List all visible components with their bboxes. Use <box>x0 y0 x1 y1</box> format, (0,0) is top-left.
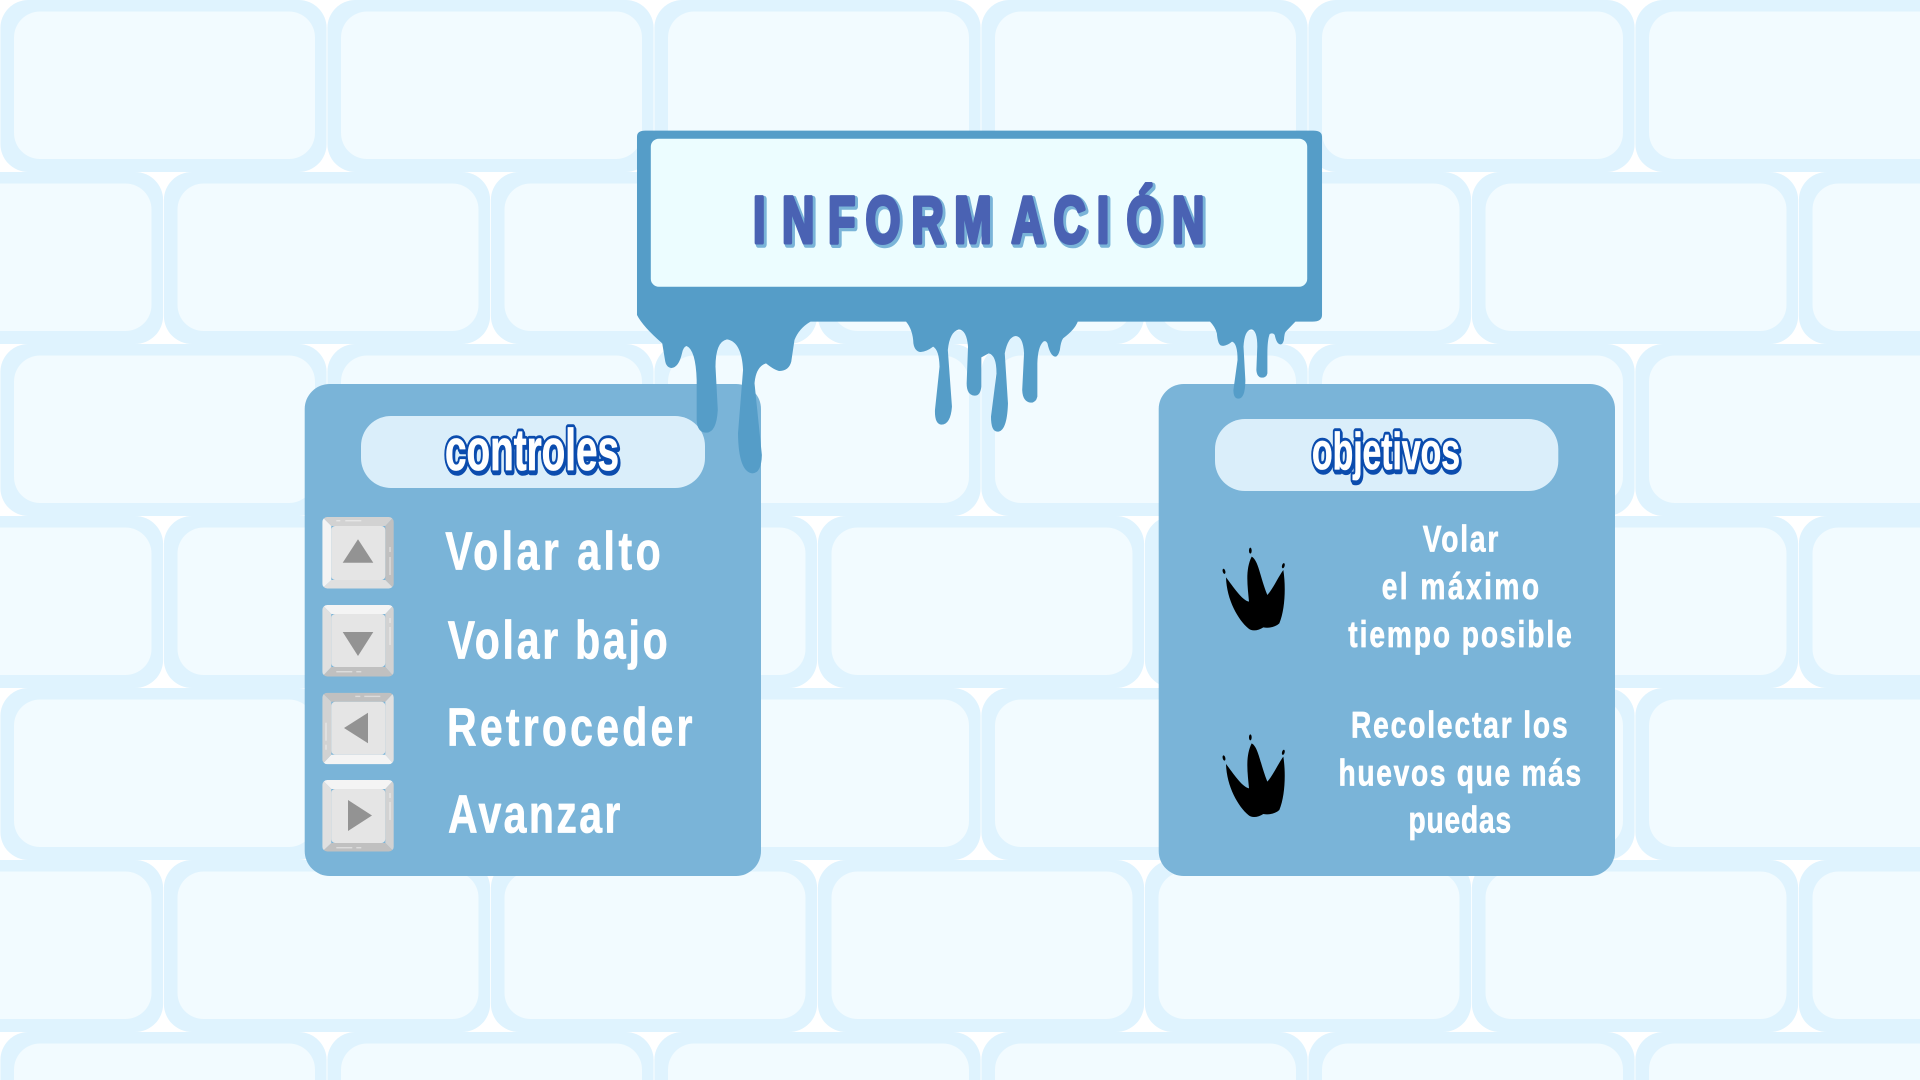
label: Volar bajo: Volar bajo <box>448 611 668 671</box>
icon: dinosaur footprint 2 <box>1222 734 1285 817</box>
title: INFORMACIÓN: INFORMACIÓN <box>753 183 1204 257</box>
key: down arrow <box>322 605 394 676</box>
title banner with dripping frame <box>637 131 1322 473</box>
text: objective 1: el máximo <box>1382 565 1539 607</box>
heading pill: objetivos <box>1215 419 1558 491</box>
title: INFORMACIÓN: INFORMACIÓN <box>755 185 1206 259</box>
key: right arrow <box>322 780 394 852</box>
text: objective 1 <box>1348 518 1572 655</box>
text: objective 1: tiempo posible <box>1348 613 1572 655</box>
key: up arrow <box>322 517 394 588</box>
heading pill: objetivos: objetivos <box>1312 423 1460 481</box>
heading pill: controles: controles <box>446 420 620 485</box>
icon: dinosaur footprint 1 <box>1222 548 1285 630</box>
label: Volar alto: Volar alto <box>445 522 661 582</box>
banner inner panel <box>651 139 1307 287</box>
text: objective 2 <box>1338 704 1581 840</box>
text: objective 2: Recolectar los <box>1351 704 1568 745</box>
label: Retroceder: Retroceder <box>447 698 692 758</box>
text: objective 1: Volar <box>1423 518 1498 559</box>
key: left arrow <box>322 693 394 764</box>
label: Avanzar: Avanzar <box>448 785 620 845</box>
heading pill: controles: controles <box>445 418 619 483</box>
panel: objetivos <box>1159 384 1615 876</box>
panel: controles <box>305 384 761 876</box>
heading pill: controles <box>361 416 705 488</box>
heading pill: controles: controles <box>445 418 619 483</box>
banner frame and drips <box>637 131 1322 473</box>
heading pill: objetivos: objetivos <box>1313 425 1461 483</box>
heading pill: objetivos: objetivos <box>1312 423 1460 481</box>
text: objective 2: huevos que más <box>1338 752 1581 793</box>
text: objective 2: puedas <box>1408 799 1511 840</box>
